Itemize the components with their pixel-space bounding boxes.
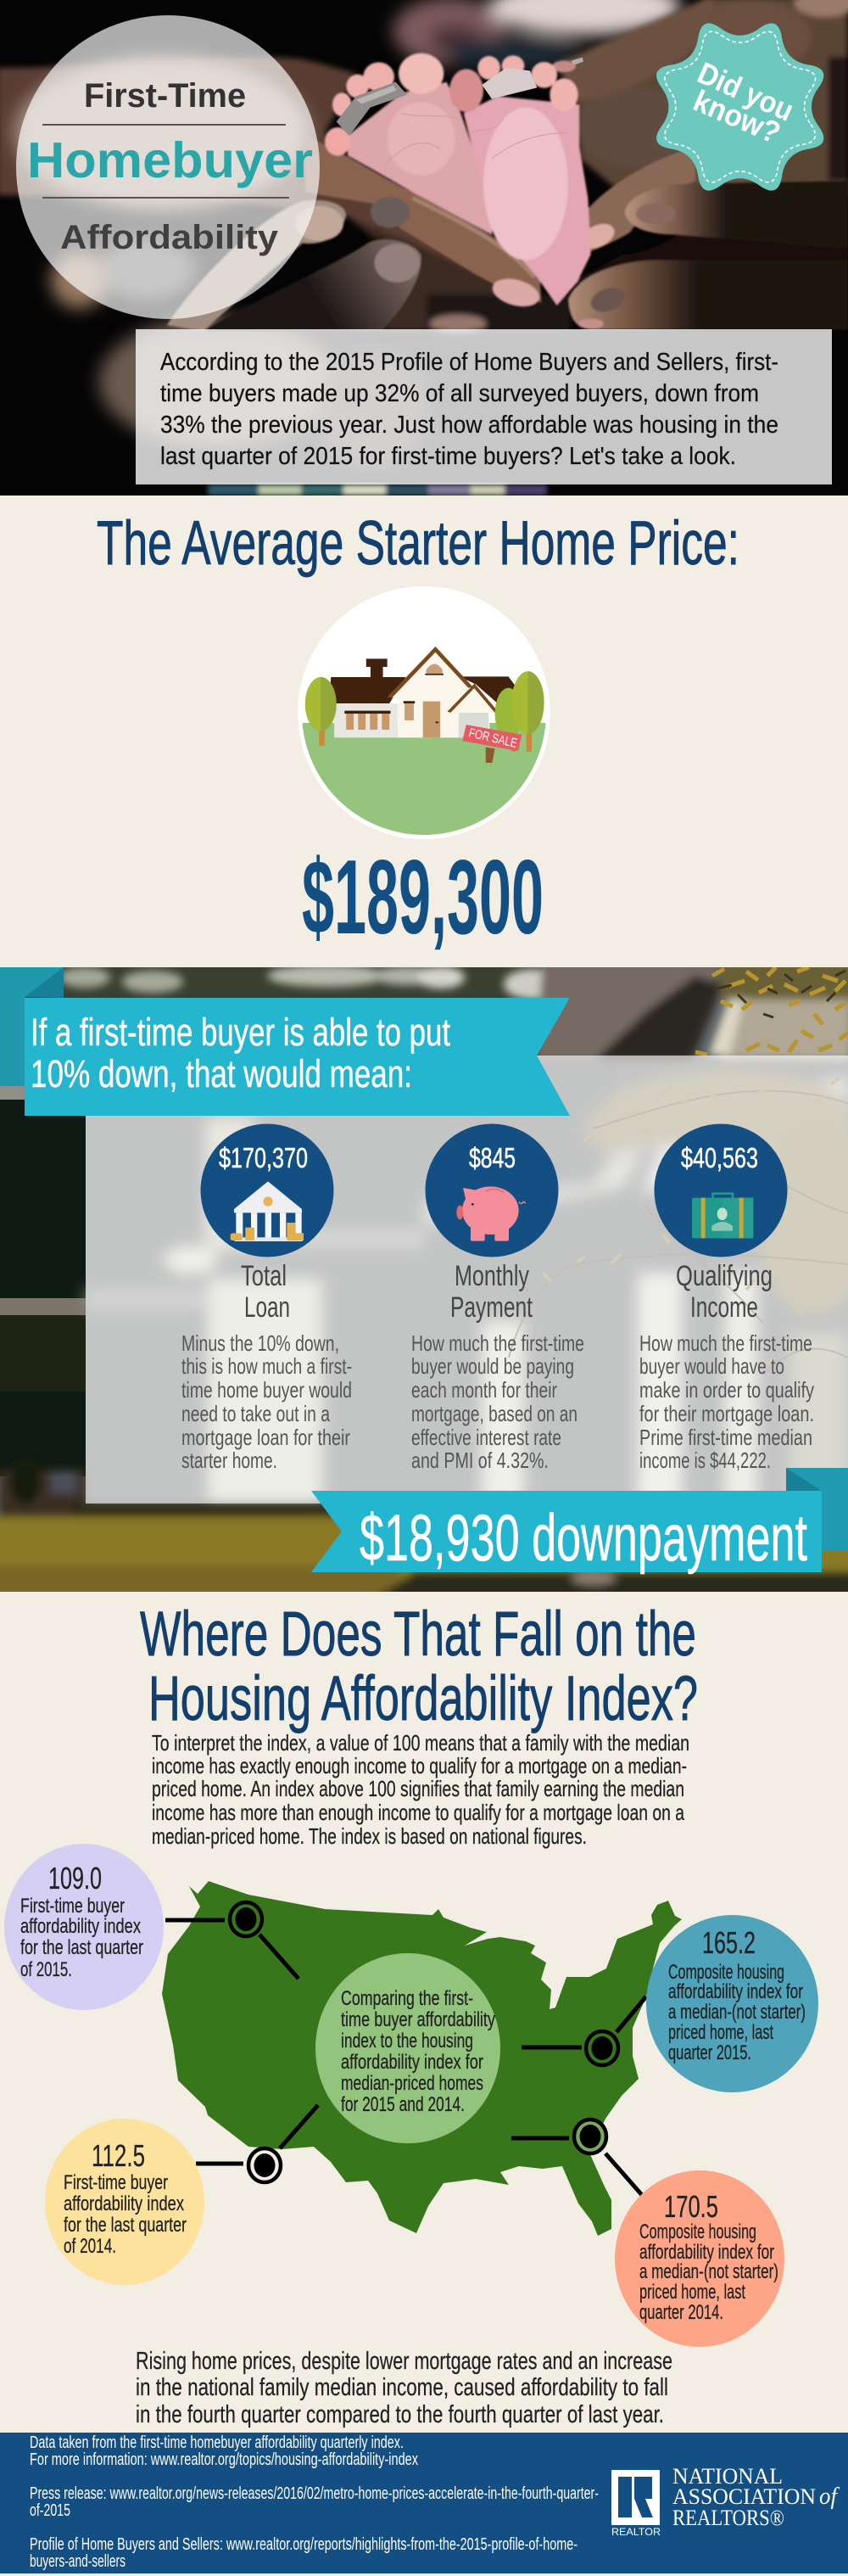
callout: center comparison: index to the housing	[341, 2030, 473, 2052]
description: total loan: Minus the 10% down,	[181, 1330, 339, 1356]
intro text box: time buyers made up 32% of all surveyed buyers, down from	[160, 380, 759, 407]
map marker: southwest	[196, 2105, 318, 2182]
baby foot right	[464, 96, 591, 305]
description: total loan: this is how much a first-	[181, 1353, 352, 1379]
description: qualifying income: buyer would have to	[639, 1353, 784, 1379]
leaves in upper right	[695, 967, 848, 1055]
description: qualifying income: income is $44,222.	[639, 1448, 771, 1473]
description: monthly payment: buyer would be paying	[411, 1353, 574, 1379]
title line: Homebuyer: Homebuyer	[27, 132, 313, 188]
label: total loan: Total	[241, 1260, 287, 1292]
description: total loan: starter home.	[181, 1448, 277, 1473]
logo: national association of realtors	[611, 2464, 840, 2538]
callout: 112.5: First-time buyer	[64, 2171, 168, 2194]
callout: center comparison: median-priced homes	[341, 2072, 483, 2095]
hero section: baby feet photo with title	[0, 0, 848, 496]
callout: 170.5	[615, 2170, 784, 2347]
footer sources text: For more information: www.realtor.org/topics/housing-affordability-index	[30, 2450, 418, 2469]
description: monthly payment: How much the first-time	[411, 1330, 584, 1356]
logo: national association of realtors: of	[819, 2484, 840, 2510]
background photo: blurred house	[0, 959, 848, 1599]
footer sources text	[30, 2433, 599, 2571]
callout: center comparison: for 2015 and 2014.	[341, 2093, 465, 2116]
callout: 109.0: of 2015.	[20, 1958, 72, 1981]
tree branches and leaves through panel	[509, 1091, 848, 1375]
label: qualifying income: Income	[690, 1291, 758, 1324]
footer sources text: buyers-and-sellers	[30, 2552, 126, 2571]
index explanation paragraph: To interpret the index, a value of 100 means that a family with the median	[152, 1730, 689, 1756]
intro text box: According to the 2015 Profile of Home Buyers and Sellers, first-	[160, 349, 778, 376]
callout: 170.5: a median-(not starter)	[639, 2260, 778, 2283]
bottom ribbon: downpayment	[311, 1468, 848, 1575]
footer	[0, 2433, 848, 2573]
map marker: southeast	[511, 2120, 642, 2195]
callout: 112.5: for the last quarter	[64, 2214, 187, 2237]
callout: 112.5: 112.5	[92, 2138, 145, 2173]
callout: 165.2: 165.2	[702, 1925, 756, 1960]
callout: 170.5: quarter 2014.	[639, 2301, 723, 2324]
callout: center comparison: Comparing the first-	[341, 1987, 473, 2010]
callout: center comparison: affordability index for	[341, 2051, 483, 2074]
description: total loan: time home buyer would	[181, 1377, 352, 1403]
callout: 170.5: 170.5	[664, 2189, 718, 2224]
heading: where does that fall	[140, 1599, 698, 1733]
top ribbon heading	[0, 967, 570, 1116]
title line: Affordability: Affordability	[60, 219, 279, 256]
description: total loan: mortgage loan for their	[181, 1425, 350, 1450]
label: monthly payment: Payment	[450, 1291, 533, 1324]
callout: 112.5	[45, 2119, 204, 2285]
description: monthly payment: each month for their	[411, 1377, 557, 1403]
top ribbon heading: 10% down, that would mean:	[31, 1052, 412, 1095]
label: total loan: Loan	[244, 1291, 290, 1324]
callout: center comparison: time buyer affordability	[341, 2008, 495, 2031]
callout: 112.5: of 2014.	[64, 2235, 116, 2258]
column: qualifying income	[639, 1123, 814, 1473]
callout: 109.0	[4, 1844, 164, 2010]
intro text box: 33% the previous year. Just how affordable was housing in the	[160, 412, 778, 439]
callout: center comparison	[315, 1953, 500, 2143]
footer sources text: of-2015	[30, 2501, 70, 2520]
logo: national association of realtors: REALTORS®	[672, 2506, 784, 2530]
label: qualifying income: Qualifying	[676, 1260, 773, 1292]
map marker: northwest	[165, 1902, 298, 1979]
index explanation paragraph: median-priced home. The index is based on national figures.	[152, 1823, 587, 1849]
footer sources text: Profile of Home Buyers and Sellers: www.realtor.org/reports/highlights-from-the-2015-profile-of-home-	[30, 2535, 577, 2554]
icon: briefcase: $40,563	[681, 1142, 758, 1173]
index explanation paragraph	[152, 1730, 689, 1849]
callout: 165.2	[646, 1915, 818, 2092]
label: monthly payment: Monthly	[455, 1260, 529, 1292]
label: total loan	[241, 1260, 290, 1324]
description: total loan	[181, 1330, 352, 1473]
callout: 109.0: 109.0	[48, 1861, 102, 1896]
shrubs and lawn	[0, 1457, 848, 1599]
label: monthly payment	[450, 1260, 533, 1324]
callout: 170.5: priced home, last	[639, 2281, 745, 2304]
left dark wall	[0, 1086, 86, 1476]
callout: 170.5: affordability index for	[639, 2241, 774, 2264]
callout: 170.5: Composite housing	[639, 2220, 756, 2243]
conclusion text	[136, 2348, 672, 2428]
description: monthly payment	[411, 1330, 584, 1473]
badge: did you know: Did you	[693, 55, 799, 128]
title line: First-Time: First-Time	[84, 77, 246, 115]
badge: did you know: know?	[689, 83, 785, 150]
callout: 109.0: First-time buyer	[20, 1895, 125, 1918]
big price number: $189,300	[302, 839, 544, 956]
description: monthly payment: effective interest rate	[411, 1425, 561, 1450]
column: total loan	[181, 1123, 352, 1473]
icon: piggy bank: $845	[469, 1142, 516, 1173]
conclusion text: Rising home prices, despite lower mortgage rates and an increase	[136, 2348, 672, 2375]
translucent panel	[86, 1056, 848, 1504]
callout: 112.5: affordability index	[64, 2192, 184, 2215]
footer sources text: Press release: www.realtor.org/news-releases/2016/02/metro-home-prices-accelerate-in-the-fourth-quarter-	[30, 2484, 599, 2503]
column: monthly payment	[411, 1123, 584, 1473]
footer sources text: Data taken from the first-time homebuyer affordability quarterly index.	[30, 2433, 404, 2452]
conclusion text: in the national family median income, caused affordability to fall	[136, 2374, 668, 2401]
icon: piggy bank	[426, 1123, 558, 1257]
description: monthly payment: and PMI of 4.32%.	[411, 1448, 549, 1473]
index explanation paragraph: priced home. An index above 100 signifies that family earning the median	[152, 1776, 684, 1801]
intro text box: last quarter of 2015 for first-time buyers? Let's take a look.	[160, 443, 736, 470]
icon: briefcase	[655, 1123, 787, 1257]
logo: national association of realtors: REALTOR	[611, 2526, 661, 2538]
description: total loan: need to take out in a	[181, 1401, 330, 1426]
logo: national association of realtors: ASSOCIATION	[672, 2484, 816, 2509]
description: monthly payment: mortgage, based on an	[411, 1401, 577, 1426]
baby foot left	[348, 82, 494, 235]
badge: did you know	[656, 23, 823, 191]
index explanation paragraph: income has more than enough income to qualify for a mortgage loan on a	[152, 1800, 684, 1825]
blurred white house columns	[86, 1069, 848, 1504]
icon: bank: $170,370	[219, 1142, 308, 1173]
for sale sign text: FOR SALE	[467, 725, 518, 751]
callout: 165.2: priced home, last	[668, 2021, 773, 2044]
label: qualifying income	[676, 1260, 773, 1324]
description: qualifying income	[639, 1330, 814, 1473]
top ribbon heading: If a first-time buyer is able to put	[31, 1011, 450, 1054]
callout: 165.2: Composite housing	[668, 1961, 784, 1984]
conclusion text: in the fourth quarter compared to the fourth quarter of last year.	[136, 2401, 664, 2428]
map of the united states	[162, 1881, 682, 2236]
hero photo: hands holding baby feet	[0, 0, 848, 496]
down payment section	[0, 959, 848, 1599]
map marker: east	[522, 1996, 646, 2065]
intro text box	[136, 329, 832, 484]
house illustration in circle	[298, 586, 550, 839]
callout: 109.0: for the last quarter	[20, 1936, 143, 1959]
callout: 109.0: affordability index	[20, 1915, 141, 1938]
logo: national association of realtors: NATIONAL	[672, 2464, 783, 2489]
icon: bank	[200, 1123, 334, 1257]
callout: 165.2: quarter 2015.	[668, 2041, 751, 2064]
fabric strip at photo bottom	[208, 484, 547, 496]
title circle	[16, 15, 320, 319]
